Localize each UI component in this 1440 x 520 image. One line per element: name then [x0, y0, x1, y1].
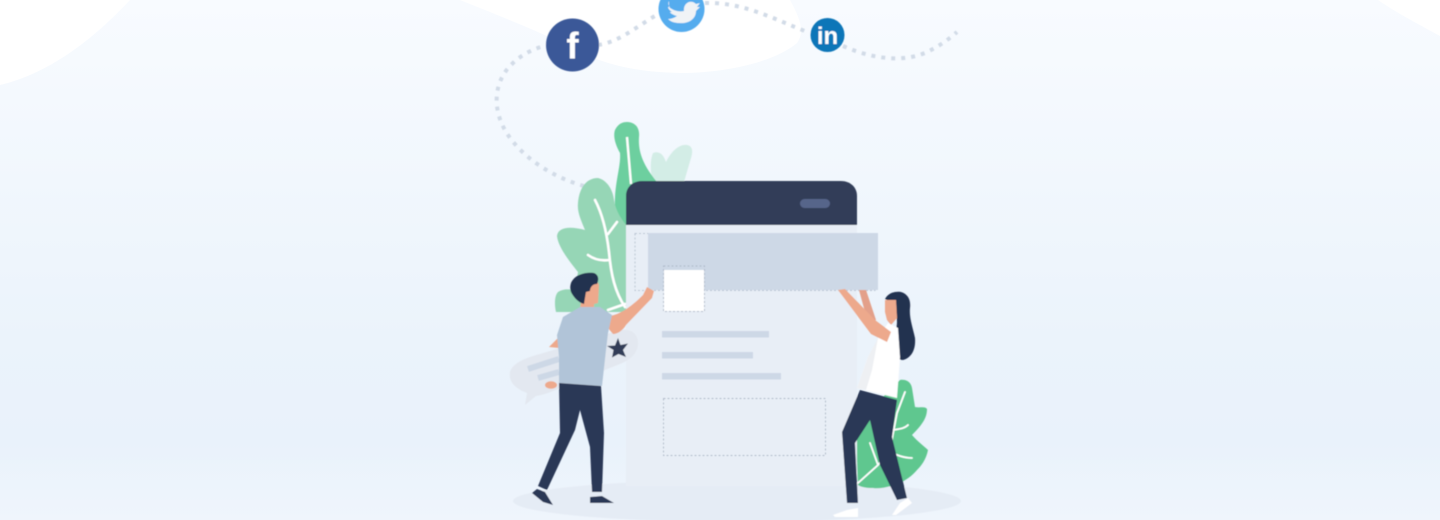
- far arm: [859, 290, 876, 323]
- shirt: [557, 307, 612, 386]
- pants: [538, 383, 604, 492]
- shoes: [532, 489, 614, 505]
- profile card: [626, 181, 878, 486]
- icon: linkedin: [810, 18, 844, 52]
- star: [607, 338, 628, 358]
- dotted connector path: [497, 3, 957, 186]
- card header bar: [626, 181, 857, 225]
- avatar outline: [664, 266, 704, 312]
- shoes: [833, 498, 912, 517]
- plant: pale back leaf: [651, 145, 692, 182]
- white blobs: [0, 0, 1440, 85]
- face: [885, 300, 897, 325]
- dotted content box: [664, 398, 826, 456]
- hair: [885, 292, 915, 360]
- ground shadow: [513, 480, 961, 520]
- icon: facebook: [546, 18, 599, 72]
- card body: [626, 222, 857, 486]
- pants: [842, 390, 907, 503]
- cover selection outline: [635, 234, 875, 290]
- icon: facebook: f: [566, 26, 579, 66]
- plant: tall green leaf: [614, 122, 657, 232]
- plant: mid green leaf: [555, 178, 627, 312]
- neck and face: [580, 280, 599, 309]
- hair: [570, 273, 598, 304]
- text lines: [662, 331, 781, 380]
- near arm: [838, 289, 891, 342]
- plant: right green leaf: [856, 380, 928, 488]
- shirt: [857, 323, 900, 398]
- speech bubble: [510, 330, 638, 405]
- shirt shadow: [857, 338, 878, 390]
- icon: twitter: [658, 0, 704, 32]
- avatar square: [664, 270, 704, 311]
- header pill: [800, 199, 830, 208]
- back arm and hand: [549, 336, 560, 348]
- man figure: [532, 273, 654, 505]
- icon: linkedin: in: [817, 23, 838, 50]
- cover banner: [648, 233, 878, 290]
- woman figure: [833, 289, 915, 517]
- raised arm: [608, 287, 654, 334]
